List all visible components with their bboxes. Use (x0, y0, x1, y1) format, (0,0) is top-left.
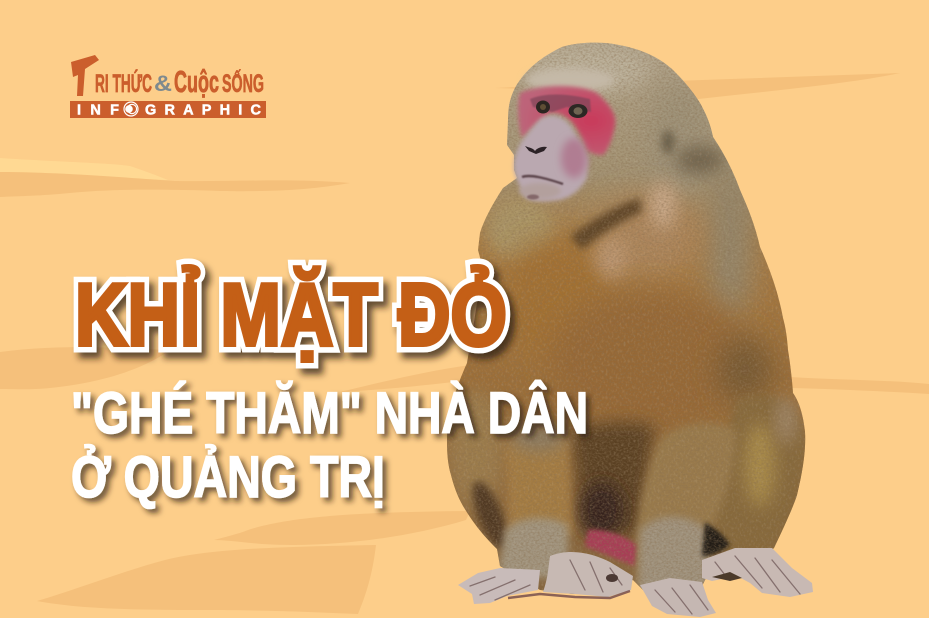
monkey: mouth and chin (522, 176, 563, 184)
monkey: front foot (640, 578, 716, 617)
banner text: INF: INF (77, 102, 119, 118)
monkey: pink rump (585, 530, 636, 566)
logo text: Trí Thức: RI THỨC (95, 68, 152, 98)
monkey: hands and feet (458, 548, 813, 617)
logo text: Sống: SỐNG (222, 68, 264, 98)
monkey: right thigh and leg (637, 394, 806, 590)
logo text: Cuộc: Cuộc (174, 64, 219, 99)
logo banner (70, 101, 266, 118)
monkey: finger lines (470, 556, 800, 614)
subtitle: Ở QUẢNG TRỊ: Ở QUẢNG TRỊ (71, 445, 385, 510)
title: KHỈ MẶT ĐỎ: KHỈ MẶT ĐỎ (75, 265, 507, 364)
monkey: eyes (536, 100, 588, 118)
subtitle: "GHÉ THĂM" NHÀ DÂN: "GHÉ THĂM" NHÀ DÂN (71, 381, 588, 446)
logo icon: T mark (71, 55, 99, 96)
banner text: GRAPHIC: GRAPHIC (145, 102, 262, 118)
logo: Tri Thức & Cuộc Sống Infographic (70, 55, 266, 118)
monkey: curled right hand (543, 552, 633, 597)
monkey: fur texture (452, 42, 806, 584)
monkey: left hand (458, 568, 540, 604)
monkey: back foot (702, 548, 813, 597)
monkey: dark belly between legs (570, 422, 655, 535)
monkey: face (514, 68, 615, 201)
monkey: left thigh and leg (448, 390, 572, 580)
monkey: body tones (486, 46, 773, 430)
logo text: ampersand: & (154, 71, 172, 96)
monkey: nose (525, 146, 547, 154)
monkey photo illustration (440, 35, 820, 618)
banner icon: O rings (124, 102, 138, 116)
title: KHỈ MẶT ĐỎ: KHỈ MẶT ĐỎ (75, 265, 507, 364)
